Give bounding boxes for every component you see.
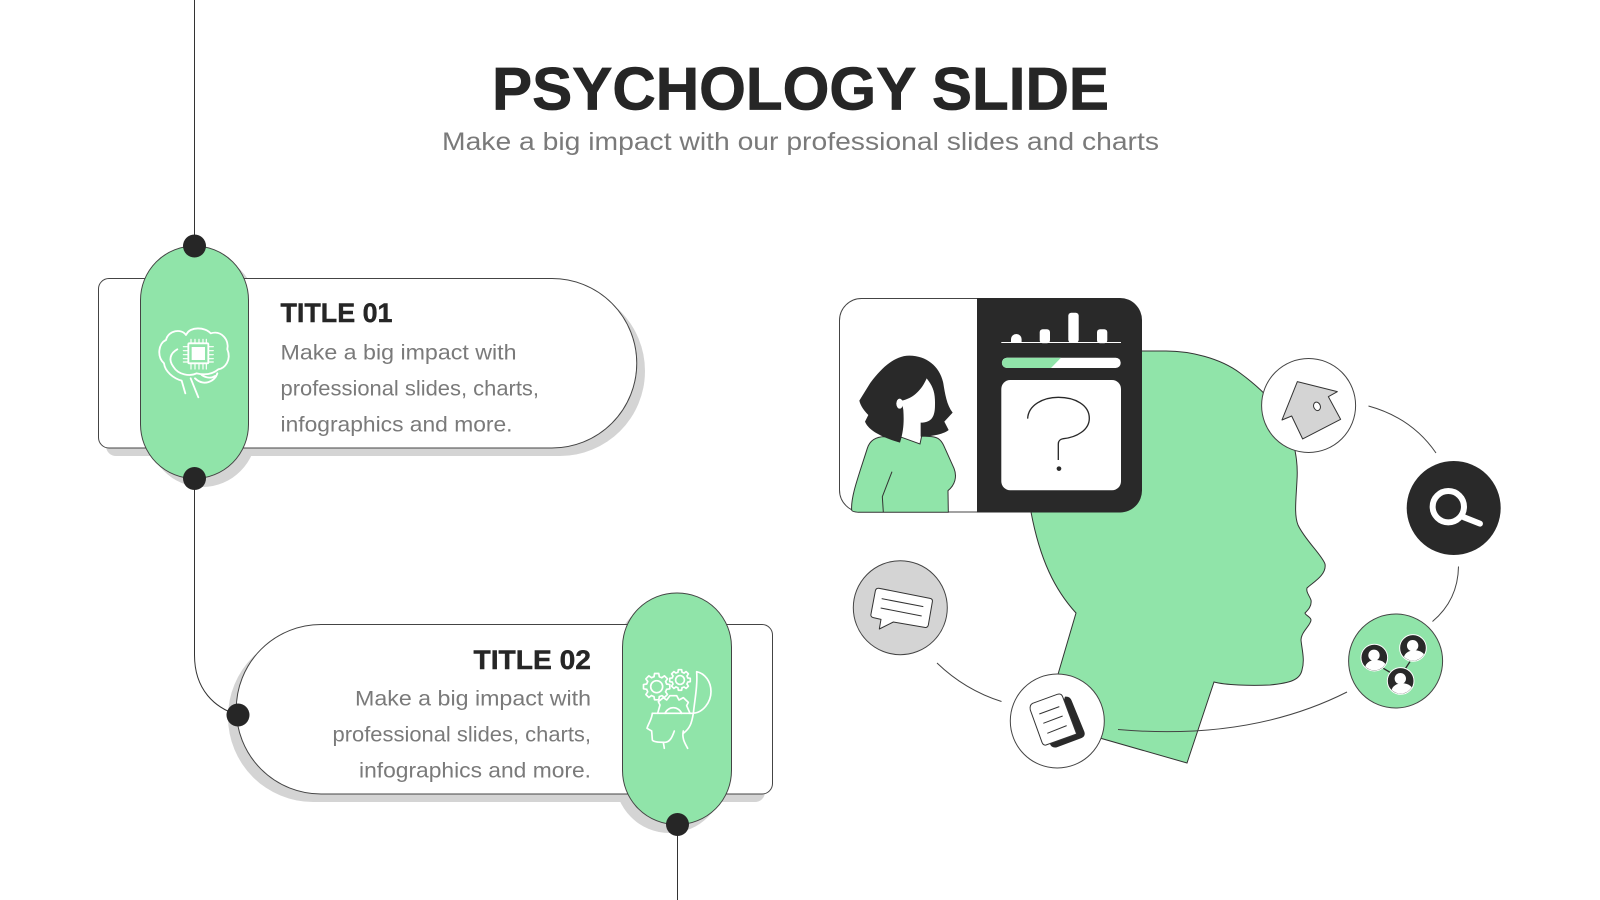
subtitle: Make a big impact with our professional slides and charts	[442, 128, 1159, 156]
panel: title 02 card	[226, 593, 772, 836]
dot top	[183, 234, 206, 258]
body text: infographics and more.	[280, 414, 512, 436]
icon: chat circle	[853, 561, 947, 655]
icon: house circle	[1262, 358, 1356, 452]
orbit arc: search to people	[1432, 566, 1458, 622]
pill shadow	[615, 601, 724, 833]
woman figure	[852, 356, 955, 512]
head silhouette	[1031, 351, 1325, 763]
orbit arc: people to document	[1118, 692, 1347, 732]
body text: Make a big impact with	[355, 688, 591, 710]
connector line: first pill to second card	[194, 478, 238, 715]
ear	[896, 399, 903, 409]
icon: people network circle	[1349, 614, 1443, 708]
panel: video call with woman and question	[840, 298, 1142, 512]
hair	[859, 356, 953, 443]
body text: professional slides, charts,	[280, 378, 539, 400]
card shadow	[228, 632, 765, 802]
question card	[1001, 380, 1121, 490]
icon: question mark	[1028, 397, 1089, 471]
title: PSYCHOLOGY SLIDE	[492, 56, 1109, 122]
icon: document circle	[1010, 674, 1104, 768]
bar chart	[1001, 313, 1121, 343]
icon: head with gears	[643, 670, 711, 748]
body text: Make a big impact with	[280, 342, 516, 364]
dot bottom	[183, 467, 206, 490]
orbit arc: chat to document	[937, 663, 1002, 702]
pill shadow	[148, 254, 256, 487]
dot left	[226, 704, 250, 726]
icon: search circle	[1407, 461, 1501, 555]
body text: professional slides, charts,	[332, 724, 591, 746]
heading: TITLE 01	[280, 298, 392, 328]
connector line: top to first pill	[194, 0, 196, 246]
card shadow	[106, 286, 645, 456]
card body	[98, 278, 637, 448]
body text	[280, 342, 539, 436]
dot bottom	[666, 813, 689, 836]
left video frame	[840, 298, 1020, 512]
dark panel	[977, 298, 1142, 512]
card body	[236, 624, 772, 794]
body text: infographics and more.	[359, 760, 591, 782]
connector line: second pill to bottom	[676, 824, 678, 900]
sleeve line	[882, 472, 892, 512]
green pill	[140, 246, 248, 478]
icon: brain with chip	[159, 328, 229, 397]
green pill	[622, 593, 732, 824]
heading: TITLE 02	[474, 645, 591, 675]
progress bar	[1002, 358, 1121, 368]
sweater	[852, 436, 955, 512]
panel: title 01 card	[98, 234, 645, 490]
orbit arc: house to search	[1368, 406, 1436, 453]
body text	[332, 688, 591, 782]
